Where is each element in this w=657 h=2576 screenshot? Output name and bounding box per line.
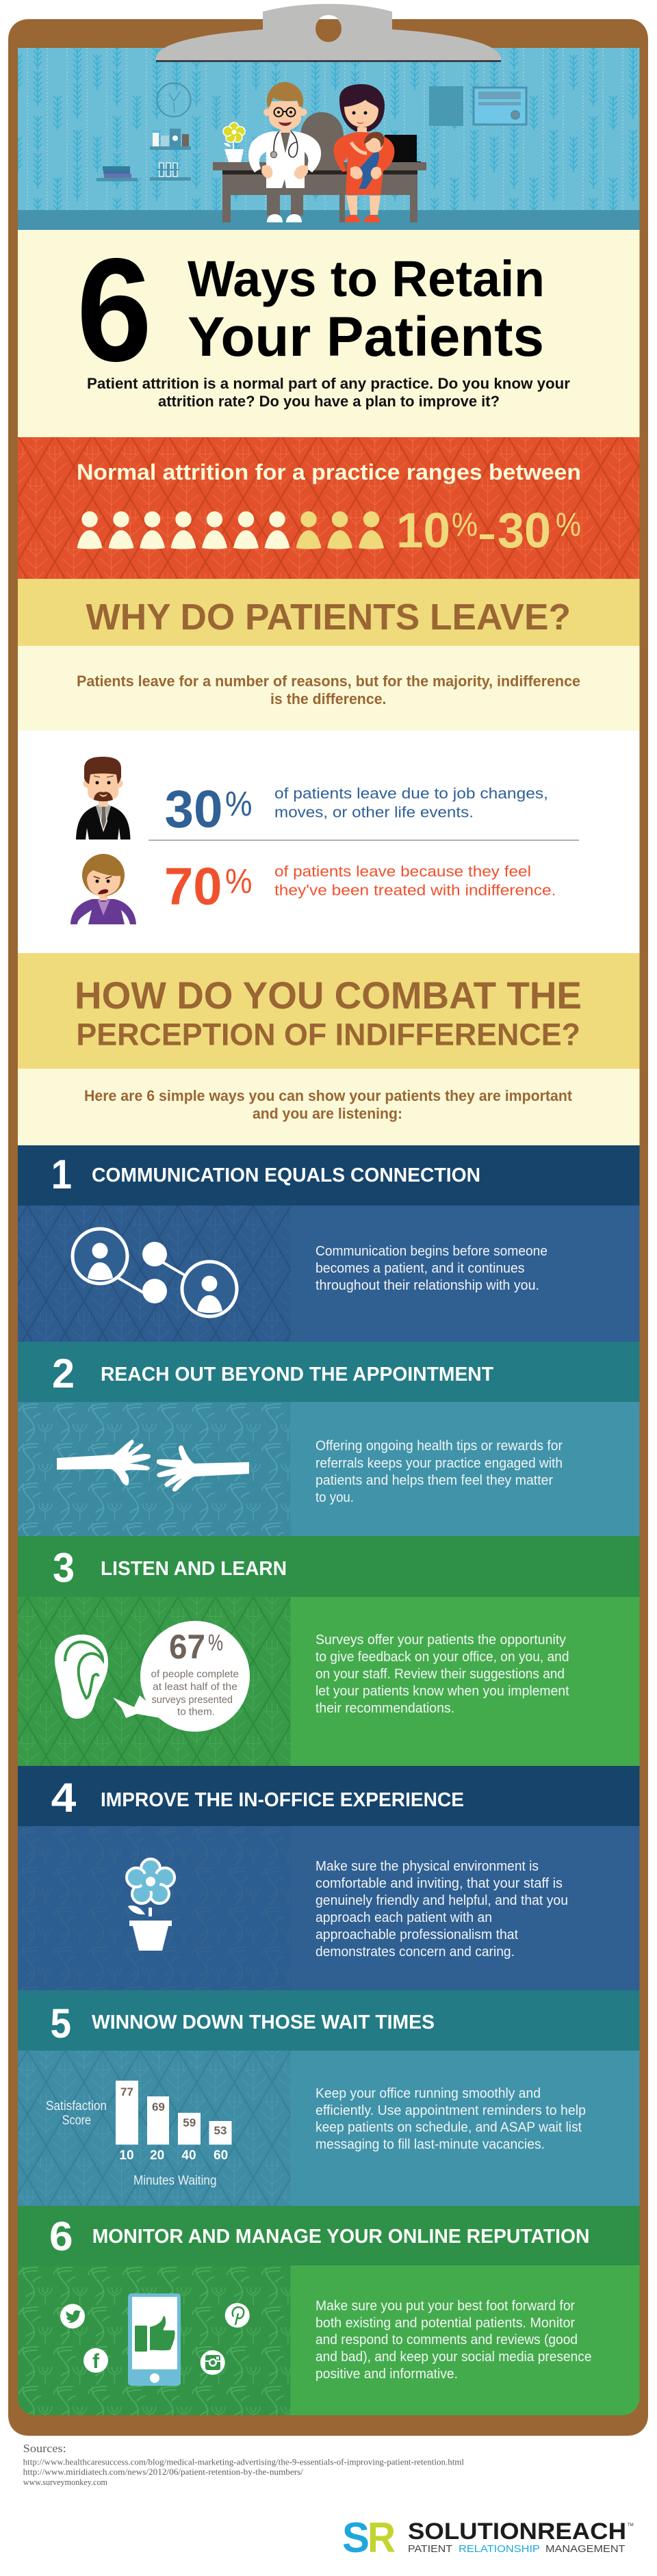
step 4 text: approach each patient with an xyxy=(315,1910,492,1925)
stat: 30 percent: moves, or other life events. xyxy=(274,803,474,821)
step 4 header xyxy=(18,1766,639,1826)
title: Ways to Retain xyxy=(188,250,545,307)
step 3 text: Surveys offer your patients the opportunity xyxy=(315,1632,566,1648)
stat: 30 percent: 30 xyxy=(164,780,223,839)
step 1 text xyxy=(315,1244,548,1293)
logo: Solutionreach: RELATIONSHIP xyxy=(459,2543,540,2555)
laptop xyxy=(380,135,421,164)
step 2 text xyxy=(315,1438,563,1505)
step 5 text: efficiently. Use appointment reminders to help xyxy=(315,2103,586,2118)
step 3 panel pattern xyxy=(18,1597,290,1766)
step 6 header: 6 xyxy=(49,2213,73,2259)
step 4 header: IMPROVE THE IN-OFFICE EXPERIENCE xyxy=(101,1789,464,1811)
step 3 text: let your patients know when you implement xyxy=(315,1684,569,1699)
step 1 panel pattern xyxy=(18,1206,290,1342)
attrition range: % xyxy=(452,507,478,543)
why patients leave intro xyxy=(18,646,639,731)
attrition range: % xyxy=(556,507,581,543)
six ways intro: Here are 6 simple ways you can show your patients they are important xyxy=(84,1087,573,1104)
attrition range xyxy=(396,504,581,558)
six ways intro xyxy=(18,1069,639,1145)
sources: http://www.miridiatech.com/news/2012/06/patient-retention-by-the-numbers/ xyxy=(23,2467,304,2477)
step 6 xyxy=(18,2206,639,2415)
icon: smartphone with thumbs up xyxy=(128,2293,181,2386)
icon: instagram xyxy=(201,2350,225,2375)
step 3 text xyxy=(315,1632,569,1716)
logo: Solutionreach: R xyxy=(368,2514,396,2562)
title xyxy=(188,250,545,368)
bar chart: satisfaction by minutes waiting: Minutes Waiting xyxy=(133,2174,216,2188)
bar chart: satisfaction by minutes waiting: 10 xyxy=(119,2148,134,2163)
heading band: why do patients leave: WHY DO PATIENTS LEAVE? xyxy=(86,597,571,638)
step 4 panel pattern xyxy=(18,1826,290,1990)
why patients leave intro: Patients leave for a number of reasons, but for the majority, indifference xyxy=(77,673,580,690)
intro text: Patient attrition is a normal part of any practice. Do you know your xyxy=(87,375,570,392)
logo: Solutionreach: PATIENT xyxy=(408,2543,452,2555)
step 4 text xyxy=(315,1859,568,1960)
step 5 header: 5 xyxy=(51,2001,71,2046)
step 3 text: on your staff. Review their suggestions and xyxy=(315,1667,565,1682)
bar chart: satisfaction by minutes waiting: 20 xyxy=(150,2148,164,2163)
step 6 text: and respond to comments and reviews (good xyxy=(315,2332,578,2347)
stat: 30 percent xyxy=(164,780,548,839)
step 5 text: Keep your office running smoothly and xyxy=(315,2086,541,2101)
stat: 70 percent: 70 xyxy=(164,857,222,916)
lower shelf with test tubes xyxy=(150,163,191,181)
heading band: combat indifference: PERCEPTION OF INDIFFERENCE? xyxy=(76,1017,580,1052)
bar chart: satisfaction by minutes waiting: 69 xyxy=(152,2100,165,2113)
icon: man in suit xyxy=(76,757,130,840)
step 5 header xyxy=(18,1990,639,2051)
icon: potted flower xyxy=(127,1859,175,1951)
step 4 text: demonstrates concern and caring. xyxy=(315,1944,515,1960)
attrition heading: Normal attrition for a practice ranges between xyxy=(77,460,581,484)
intro text xyxy=(87,375,570,410)
step 2 header: 2 xyxy=(52,1351,75,1396)
attrition range: 10 xyxy=(396,504,450,558)
heading band: combat indifference: HOW DO YOU COMBAT THE xyxy=(75,974,582,1017)
people row icons xyxy=(77,511,384,549)
step 2 text: referrals keeps your practice engaged with xyxy=(315,1456,563,1471)
step 2 text: to you. xyxy=(315,1490,354,1505)
chair xyxy=(300,112,344,171)
step 2 header: REACH OUT BEYOND THE APPOINTMENT xyxy=(101,1364,493,1385)
callout: survey bubble: at least half of the xyxy=(153,1681,237,1693)
clipboard metal clip xyxy=(156,4,501,62)
step 5 header: WINNOW DOWN THOSE WAIT TIMES xyxy=(92,2012,435,2033)
step 3 text: their recommendations. xyxy=(315,1701,454,1716)
step 5 text xyxy=(315,2086,586,2152)
bar chart: satisfaction by minutes waiting: 40 xyxy=(181,2148,196,2163)
stat: 70 percent xyxy=(164,857,556,916)
logo: Solutionreach: S xyxy=(342,2514,370,2562)
logo: Solutionreach: TM xyxy=(628,2523,634,2527)
upper shelf with bottles xyxy=(150,129,191,150)
step 3 header xyxy=(18,1536,639,1597)
callout: survey bubble: surveys presented xyxy=(152,1694,233,1706)
icon: facebook xyxy=(83,2348,108,2373)
step 2 text: Offering ongoing health tips or rewards for xyxy=(315,1438,563,1453)
title panel xyxy=(18,227,639,437)
framed certificate xyxy=(474,88,526,125)
doctor xyxy=(248,82,321,222)
statistics panel xyxy=(18,731,639,953)
step 1 text: Communication begins before someone xyxy=(315,1244,548,1259)
step 1 header: 1 xyxy=(51,1152,72,1197)
callout: survey bubble: to them. xyxy=(177,1706,215,1717)
step 5 panel pattern xyxy=(18,2051,290,2206)
six ways intro: and you are listening: xyxy=(253,1105,402,1122)
attrition panel xyxy=(18,437,639,579)
step 6 text: both existing and potential patients. Monitor xyxy=(315,2315,575,2330)
bar chart: satisfaction by minutes waiting: 59 xyxy=(183,2116,196,2129)
bar chart: satisfaction by minutes waiting xyxy=(46,2081,231,2188)
icon: twitter xyxy=(60,2304,85,2328)
icon: ear xyxy=(55,1635,108,1719)
bar chart: satisfaction by minutes waiting: Score xyxy=(62,2113,91,2128)
step 4 text: comfortable and inviting, that your staff is xyxy=(315,1876,563,1891)
step 2 header xyxy=(18,1342,639,1402)
intro text: attrition rate? Do you have a plan to improve it? xyxy=(158,393,500,410)
step 4 header: 4 xyxy=(51,1775,77,1821)
step 1 xyxy=(18,1145,639,1342)
sources: http://www.healthcaresuccess.com/blog/medical-marketing-advertising/the-9-essentials-of-improving-patient-retention.html xyxy=(23,2458,465,2467)
stat: 30 percent: of patients leave due to job changes, xyxy=(274,785,548,802)
heading band: combat indifference xyxy=(18,953,639,1069)
sources: www.surveymonkey.com xyxy=(23,2477,107,2487)
wall clock xyxy=(157,83,190,116)
step 4 text: Make sure the physical environment is xyxy=(315,1859,539,1874)
step 2 panel pattern xyxy=(18,1402,290,1536)
step 6 header: MONITOR AND MANAGE YOUR ONLINE REPUTATION xyxy=(92,2226,589,2248)
icon: reaching hands xyxy=(57,1440,249,1492)
stat: 70 percent: % xyxy=(225,861,252,900)
step 6 panel pattern xyxy=(18,2265,290,2415)
step 5 text: keep patients on schedule, and ASAP wait list xyxy=(315,2120,582,2135)
callout: survey bubble: of people complete xyxy=(151,1668,239,1680)
step 3 xyxy=(18,1536,639,1766)
logo: Solutionreach: MANAGEMENT xyxy=(545,2543,626,2555)
sources xyxy=(23,2442,465,2487)
bar chart: satisfaction by minutes waiting: 60 xyxy=(214,2148,228,2163)
step 6 text: and bad), and keep your social media presence xyxy=(315,2350,591,2365)
step 2 text: patients and helps them feel they matter xyxy=(315,1473,553,1488)
step 6 header xyxy=(18,2206,639,2265)
heading band: why do patients leave xyxy=(18,579,639,646)
books on shelf xyxy=(96,166,138,181)
attrition range: 30 xyxy=(498,504,551,558)
logo: Solutionreach: SOLUTIONREACH xyxy=(408,2519,626,2545)
step 1 header xyxy=(18,1145,639,1206)
logo: Solutionreach xyxy=(342,2514,634,2562)
sources: Sources: xyxy=(23,2442,66,2455)
stat: 70 percent: of patients leave because they feel xyxy=(274,863,531,880)
bar chart: satisfaction by minutes waiting: 77 xyxy=(120,2085,133,2098)
title: Your Patients xyxy=(188,306,544,368)
step 4 xyxy=(18,1766,639,1990)
step 6 text: positive and informative. xyxy=(315,2367,458,2382)
step 4 text: genuinely friendly and helpful, and that you xyxy=(315,1893,568,1908)
icon: upset woman xyxy=(70,854,136,924)
step 4 text: approachable professionalism that xyxy=(315,1927,518,1942)
step 2 xyxy=(18,1342,639,1536)
stat: 70 percent: they've been treated with indifference. xyxy=(274,881,556,899)
flower on desk xyxy=(223,122,245,162)
callout: survey bubble xyxy=(113,1621,250,1732)
big number 6: 6 xyxy=(77,227,152,392)
step 3 header: 3 xyxy=(53,1545,75,1591)
step 6 text xyxy=(315,2299,591,2382)
step 6 text: Make sure you put your best foot forward for xyxy=(315,2299,575,2314)
desk xyxy=(213,162,426,222)
stat: 30 percent: % xyxy=(225,784,252,823)
icon: pinterest xyxy=(225,2303,250,2328)
why patients leave intro: is the difference. xyxy=(270,690,386,707)
framed picture xyxy=(429,86,463,126)
mother holding baby xyxy=(333,84,394,222)
hero illustration: office scene xyxy=(18,48,639,230)
callout: survey bubble: % xyxy=(208,1630,223,1655)
bar chart: satisfaction by minutes waiting: 53 xyxy=(214,2124,227,2137)
step 5 xyxy=(18,1990,639,2206)
step 1 text: throughout their relationship with you. xyxy=(315,1278,539,1293)
step 1 header: COMMUNICATION EQUALS CONNECTION xyxy=(92,1165,480,1186)
step 1 text: becomes a patient, and it continues xyxy=(315,1261,524,1276)
icon: connected people xyxy=(73,1229,237,1316)
step 3 header: LISTEN AND LEARN xyxy=(101,1558,287,1580)
bar chart: satisfaction by minutes waiting: Satisfaction xyxy=(46,2099,107,2113)
step 3 text: to give feedback on your office, on you, and xyxy=(315,1650,569,1665)
icon: facebook: f xyxy=(92,2350,100,2373)
step 5 text: messaging to fill last-minute vacancies. xyxy=(315,2137,545,2152)
callout: survey bubble: 67 xyxy=(169,1628,205,1666)
